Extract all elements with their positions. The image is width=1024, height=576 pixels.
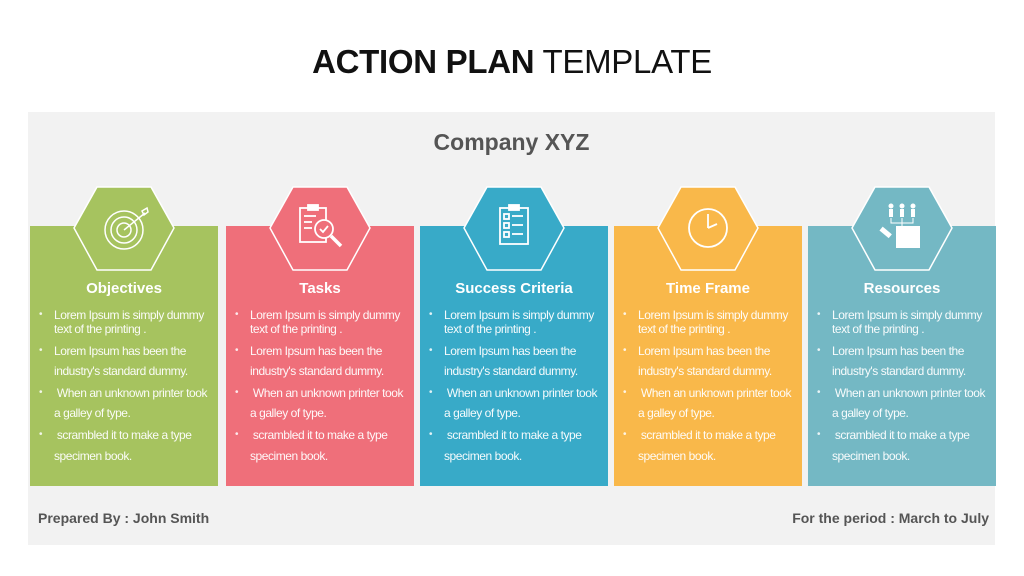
panel: objectives: When an unknown printer took — [57, 386, 207, 400]
panel: tasks: • — [235, 309, 239, 320]
panel: success criteria: When an unknown printer took — [447, 386, 597, 400]
title: ACTION PLAN TEMPLATE — [312, 43, 712, 80]
panel: time frame: When an unknown printer took — [641, 386, 791, 400]
icon: people and note — [851, 186, 953, 271]
panel: success criteria — [420, 226, 608, 486]
panel: resources: Resources — [864, 280, 940, 297]
panel: resources: a galley of type. — [832, 406, 908, 420]
panel: resources: • — [817, 387, 821, 398]
panel: objectives: • — [39, 387, 43, 398]
footer: prepared by: Prepared By : John Smith — [38, 510, 209, 526]
panel: success criteria: • — [429, 309, 433, 320]
icon: clock — [657, 186, 759, 271]
panel: objectives — [30, 226, 218, 486]
panel: time frame: • — [623, 387, 627, 398]
panel: objectives: • — [39, 309, 43, 320]
panel: time frame: • — [623, 429, 627, 440]
panel: time frame: scrambled it to make a type — [641, 428, 775, 442]
panel: time frame: text of the printing . — [638, 322, 730, 336]
panel: success criteria: • — [429, 345, 433, 356]
panel: time frame: Time Frame — [666, 280, 750, 297]
panel: objectives: a galley of type. — [54, 406, 130, 420]
panel: time frame — [614, 226, 802, 486]
panel: success criteria: Success Criteria — [455, 280, 573, 297]
panel: objectives: specimen book. — [54, 449, 132, 463]
panel: resources: • — [817, 309, 821, 320]
panel: tasks: • — [235, 429, 239, 440]
panel: time frame: a galley of type. — [638, 406, 714, 420]
panel: time frame: specimen book. — [638, 449, 716, 463]
panel: success criteria: text of the printing . — [444, 322, 536, 336]
panel: resources: • — [817, 345, 821, 356]
icon: checklist — [463, 186, 565, 271]
panel: tasks: Lorem Ipsum is simply dummy — [250, 308, 400, 322]
panel: tasks — [226, 226, 414, 486]
panel: resources: • — [817, 429, 821, 440]
panel: tasks: Lorem Ipsum has been the — [250, 344, 382, 358]
icon: target hexagon — [73, 186, 175, 271]
panel: success criteria: • — [429, 387, 433, 398]
panel: objectives: Lorem Ipsum is simply dummy — [54, 308, 204, 322]
panel: resources: text of the printing . — [832, 322, 924, 336]
panel: tasks: specimen book. — [250, 449, 328, 463]
panel: objectives: • — [39, 429, 43, 440]
subtitle: Company XYZ — [434, 129, 589, 155]
panel: success criteria: Lorem Ipsum is simply dummy — [444, 308, 594, 322]
panel: tasks: a galley of type. — [250, 406, 326, 420]
footer: period: For the period : March to July — [792, 510, 989, 526]
panel: resources: Lorem Ipsum has been the — [832, 344, 964, 358]
panel: success criteria: • — [429, 429, 433, 440]
panel: objectives: scrambled it to make a type — [57, 428, 191, 442]
icon: clipboard magnifier — [269, 186, 371, 271]
panel: success criteria: specimen book. — [444, 449, 522, 463]
panel: tasks: scrambled it to make a type — [253, 428, 387, 442]
panel: objectives: Objectives — [86, 280, 162, 297]
panel: objectives: industry's standard dummy. — [54, 364, 188, 378]
panel: resources: Lorem Ipsum is simply dummy — [832, 308, 982, 322]
panel: tasks: industry's standard dummy. — [250, 364, 384, 378]
panel: success criteria: a galley of type. — [444, 406, 520, 420]
panel: tasks: • — [235, 387, 239, 398]
panel: time frame: Lorem Ipsum is simply dummy — [638, 308, 788, 322]
panel: success criteria: scrambled it to make a type — [447, 428, 581, 442]
panel: tasks: text of the printing . — [250, 322, 342, 336]
panel: tasks: When an unknown printer took — [253, 386, 403, 400]
panel: objectives: text of the printing . — [54, 322, 146, 336]
panel: resources: industry's standard dummy. — [832, 364, 966, 378]
panel: success criteria: Lorem Ipsum has been the — [444, 344, 576, 358]
panel: objectives: Lorem Ipsum has been the — [54, 344, 186, 358]
panel: background — [28, 112, 995, 545]
panel: time frame: industry's standard dummy. — [638, 364, 772, 378]
panel: time frame: • — [623, 309, 627, 320]
panel: time frame: • — [623, 345, 627, 356]
panel: resources: specimen book. — [832, 449, 910, 463]
panel: time frame: Lorem Ipsum has been the — [638, 344, 770, 358]
panel: resources: When an unknown printer took — [835, 386, 985, 400]
panel: resources — [808, 226, 996, 486]
panel: tasks: Tasks — [299, 280, 341, 297]
panel: success criteria: industry's standard dummy. — [444, 364, 578, 378]
panel: objectives: • — [39, 345, 43, 356]
panel: tasks: • — [235, 345, 239, 356]
panel: resources: scrambled it to make a type — [835, 428, 969, 442]
